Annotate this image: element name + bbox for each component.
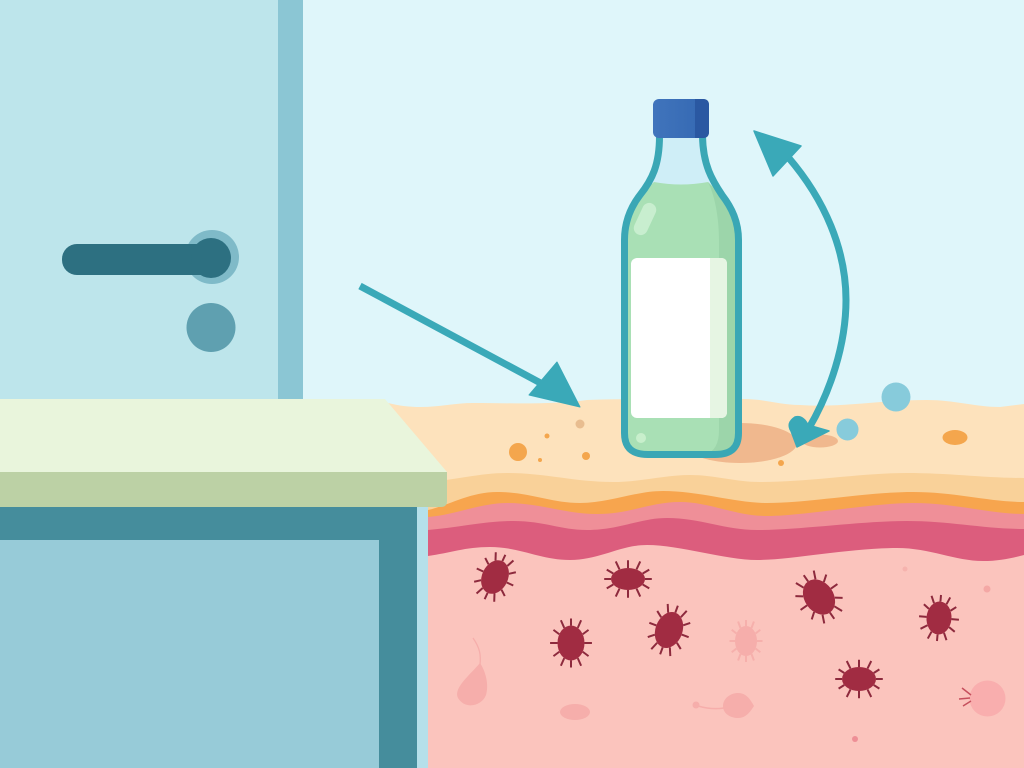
germ 5 bbox=[785, 562, 853, 632]
germ 2 bbox=[604, 560, 652, 598]
germ 4 bbox=[640, 599, 698, 661]
bubbles bbox=[836, 382, 910, 440]
bottle highlight bbox=[631, 201, 659, 237]
layer: pale orange bbox=[428, 473, 1024, 560]
counter front bbox=[0, 472, 447, 507]
counter top bbox=[0, 399, 447, 472]
layer: sand surface bbox=[388, 399, 1024, 560]
small dots bbox=[852, 566, 990, 742]
teardrop cell bbox=[457, 638, 487, 705]
icon: door handle bbox=[62, 230, 239, 284]
cabinet frame bbox=[0, 505, 417, 768]
bottle liquid bbox=[624, 182, 738, 454]
layer: pink bbox=[428, 502, 1024, 600]
icon: door lock bbox=[186, 303, 236, 352]
arrow: curved double-headed bbox=[754, 131, 846, 447]
round cell with spikes bbox=[959, 680, 1006, 716]
orange particles bbox=[509, 420, 968, 466]
cabinet door bbox=[0, 540, 379, 768]
bottle outline bbox=[624, 136, 738, 454]
faded cells in skin bbox=[457, 566, 1006, 742]
germ 6 bbox=[917, 593, 961, 643]
bottle label bbox=[631, 258, 727, 418]
faded germ bbox=[730, 620, 762, 662]
arrow: straight pointing to surface bbox=[360, 286, 580, 407]
layer: skin tissue bbox=[428, 545, 1024, 768]
door bbox=[0, 0, 303, 402]
liquid shade bbox=[706, 182, 738, 454]
shadow under bottle bbox=[683, 423, 838, 463]
oval cell bbox=[560, 704, 590, 720]
bottle cap bbox=[653, 99, 709, 138]
bottom highlight bbox=[636, 433, 646, 443]
germ 1 bbox=[466, 546, 524, 608]
bottle bbox=[624, 99, 738, 454]
skin layers bbox=[388, 399, 1024, 768]
layer: deep pink bbox=[428, 518, 1024, 620]
cell with tail bbox=[692, 693, 754, 718]
counter and cabinet bbox=[0, 399, 447, 768]
germ 3 bbox=[550, 618, 592, 668]
layer: orange bbox=[428, 491, 1024, 560]
germs bbox=[466, 546, 961, 698]
cabinet edge bbox=[417, 505, 428, 768]
bottle neck glass bbox=[640, 138, 722, 195]
germ 7 bbox=[835, 660, 883, 698]
